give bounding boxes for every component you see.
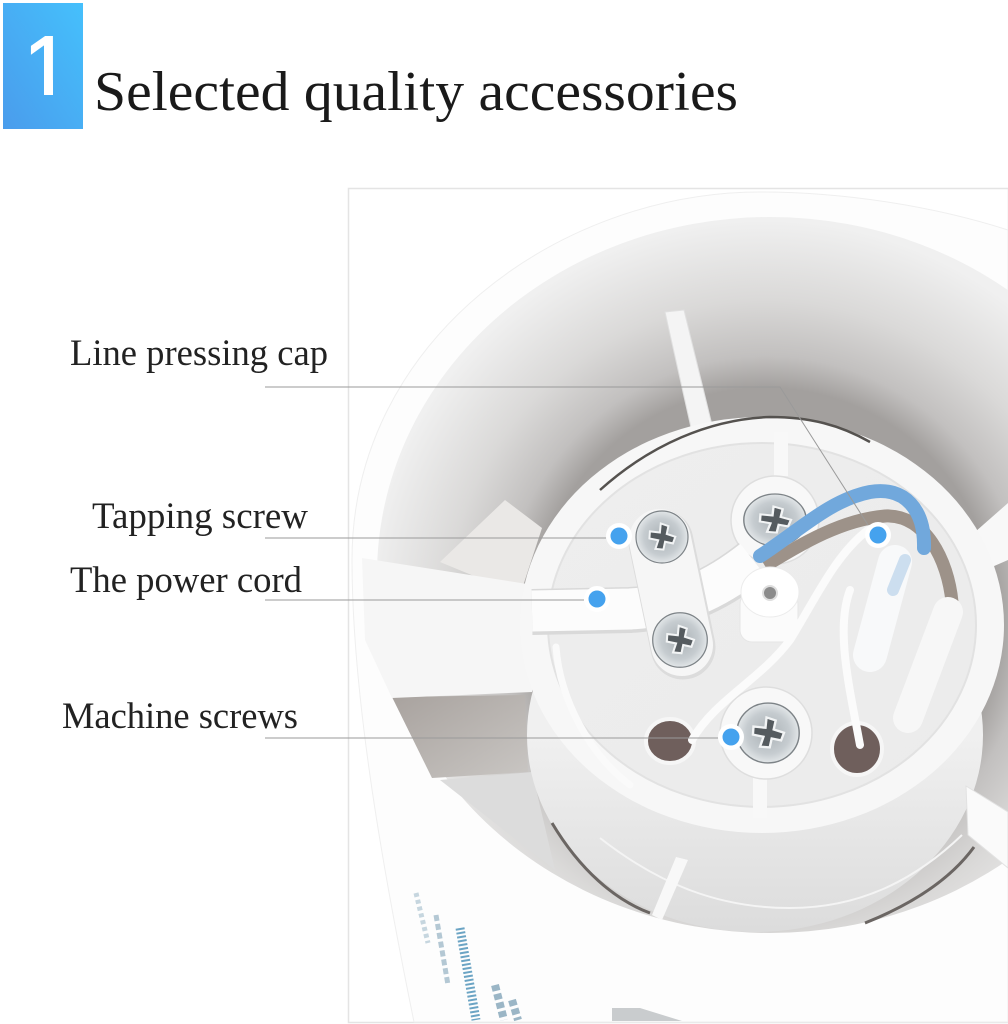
lower fan blade <box>392 695 528 778</box>
screw boss bottom <box>720 687 812 779</box>
fan opening inner wall <box>377 217 1008 933</box>
callout: line pressing cap <box>70 333 891 548</box>
machine screw <box>737 703 799 763</box>
badge number 1: 1 <box>24 19 70 113</box>
body print marks <box>416 893 518 1020</box>
right lower strut <box>966 786 1008 868</box>
clamp screw lower <box>653 613 707 667</box>
brown wire <box>765 516 952 602</box>
dark gap arcs <box>552 823 974 923</box>
cord clamp <box>660 540 683 647</box>
fan body outer rim <box>352 192 1008 1022</box>
callout: machine screws: Machine screws <box>62 696 298 737</box>
right upper strut <box>975 503 1008 570</box>
clamp screw upper <box>636 511 688 563</box>
badge number 1 <box>3 3 83 129</box>
terminal capsule rear <box>908 612 948 718</box>
callout: the power cord: The power cord <box>70 560 302 601</box>
white lead wires <box>692 530 868 745</box>
callout: tapping screw: Tapping screw <box>92 496 308 537</box>
product photo panel <box>348 188 1008 1022</box>
callout: tapping screw <box>92 496 632 549</box>
hub left groove <box>556 647 630 785</box>
left strut <box>362 558 540 698</box>
hole right <box>832 723 882 775</box>
hub ribs <box>753 432 788 818</box>
hub dark edge <box>600 417 870 490</box>
hub plate <box>520 417 1004 833</box>
lower left wall piece <box>440 772 555 870</box>
hub inner face <box>548 443 976 807</box>
bottom rib <box>652 857 688 920</box>
screw top <box>744 494 806 546</box>
blue wire <box>760 491 924 556</box>
top strut <box>665 310 712 432</box>
wiring post <box>740 567 799 642</box>
terminal capsule front <box>870 560 905 655</box>
title: Selected quality accessories <box>94 61 738 123</box>
motor cylinder <box>527 538 983 932</box>
cylinder rings <box>600 835 962 908</box>
hole left <box>646 719 694 763</box>
callout: machine screws <box>62 696 744 750</box>
body label patch <box>612 1008 682 1021</box>
callout: line pressing cap: Line pressing cap <box>70 333 328 374</box>
callout: the power cord <box>70 560 610 612</box>
screw boss top <box>731 476 819 564</box>
power cord sheath <box>532 560 753 612</box>
upper fan blade <box>440 500 542 595</box>
